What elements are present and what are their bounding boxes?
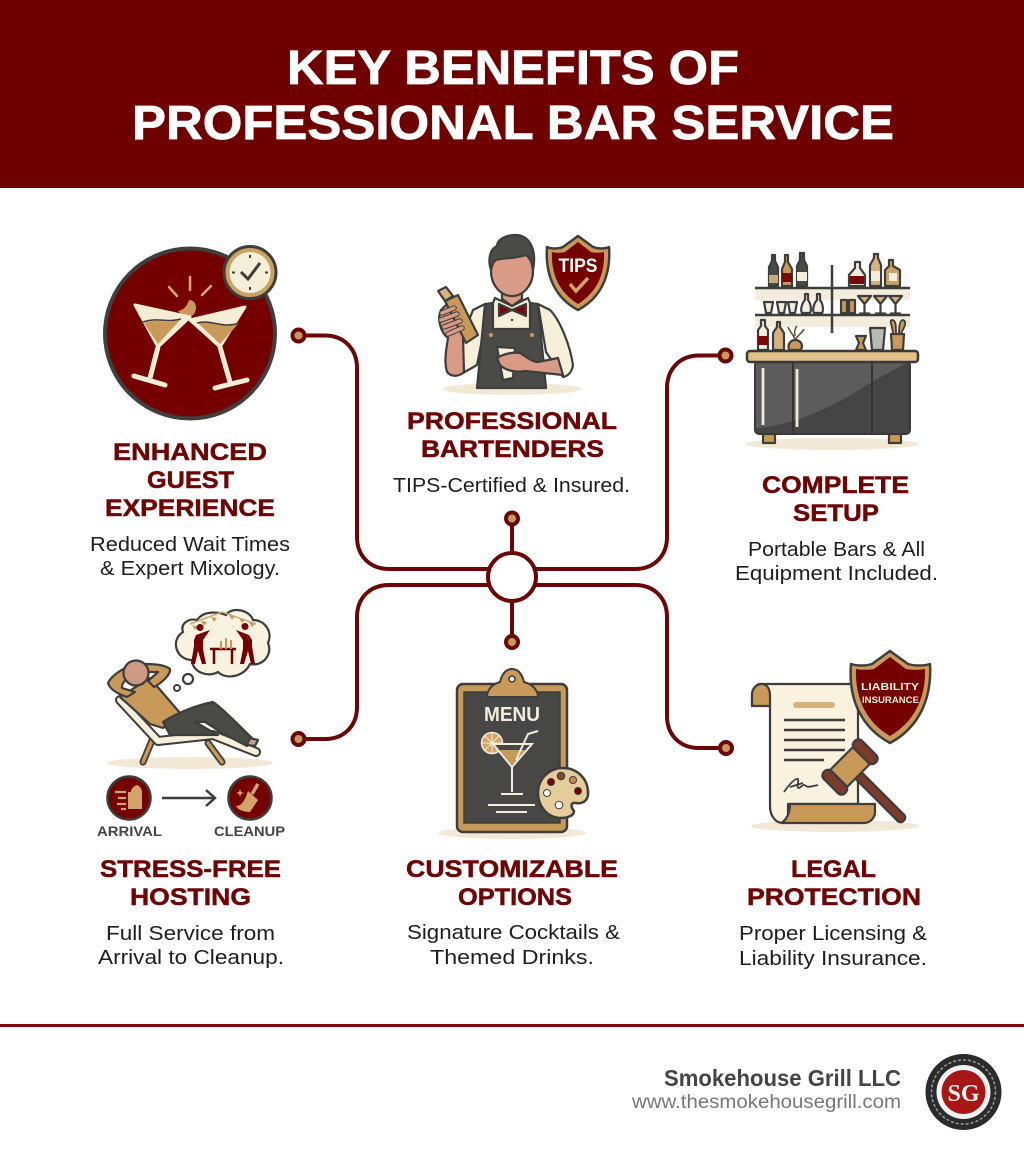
heading: STRESS-FREE	[100, 856, 281, 883]
title: PROFESSIONAL BAR SERVICE	[132, 97, 894, 150]
heading	[407, 408, 617, 463]
heading	[747, 856, 921, 911]
icon: bartender with TIPS shield: TIPS	[558, 256, 598, 277]
heading	[100, 856, 281, 911]
description: Proper Licensing &	[739, 923, 928, 945]
description	[739, 923, 928, 970]
icon: menu clipboard with palette	[438, 669, 588, 839]
heading: BARTENDERS	[421, 436, 604, 463]
website: www.thesmokehousegrill.com	[631, 1091, 901, 1113]
description: & Expert Mixology.	[100, 558, 280, 580]
description: Full Service from	[106, 923, 275, 945]
heading: ENHANCED	[113, 439, 267, 466]
logo	[926, 1054, 1002, 1130]
heading: HOSTING	[130, 884, 251, 911]
description	[98, 923, 284, 969]
title: KEY BENEFITS OF	[287, 42, 739, 95]
heading: PROTECTION	[747, 884, 921, 911]
heading: OPTIONS	[458, 884, 572, 911]
heading: LEGAL	[791, 856, 876, 883]
description: TIPS-Certified & Insured.	[393, 475, 630, 497]
icon: bartender with TIPS shield	[438, 235, 609, 395]
description: Arrival to Cleanup.	[98, 947, 284, 969]
description: Equipment Included.	[735, 563, 938, 585]
header banner	[0, 0, 1024, 188]
description: Signature Cocktails &	[407, 922, 621, 944]
heading	[762, 472, 909, 527]
panel: customizable options	[406, 669, 621, 969]
heading: CUSTOMIZABLE	[406, 856, 618, 883]
icon: relaxed host on lounger with thought cloud	[97, 610, 285, 839]
footer	[0, 1024, 1024, 1130]
heading: EXPERIENCE	[105, 495, 275, 522]
heading	[406, 856, 618, 911]
company name: Smokehouse Grill LLC	[664, 1065, 901, 1091]
panel: professional bartenders	[393, 235, 630, 497]
icon: relaxed host on lounger with thought cloud: ARRIVAL	[97, 824, 162, 839]
heading: PROFESSIONAL	[407, 408, 617, 435]
description: Liability Insurance.	[739, 948, 927, 970]
title	[132, 42, 894, 150]
icon: contract scroll, gavel and liability shield: LIABILITY	[861, 681, 919, 693]
icon: relaxed host on lounger with thought cloud: CLEANUP	[214, 824, 285, 839]
icon: menu clipboard with palette: MENU	[484, 704, 540, 726]
panel: stress-free hosting	[97, 610, 285, 969]
description	[735, 539, 938, 585]
icon: clinking glasses with clock	[105, 246, 276, 418]
connector hub diagram	[292, 330, 732, 754]
description: Themed Drinks.	[430, 947, 594, 969]
heading: GUEST	[147, 467, 234, 494]
description	[407, 922, 621, 969]
heading: COMPLETE	[762, 472, 909, 499]
icon: portable bar with shelves	[745, 253, 919, 450]
panel: enhanced guest experience	[90, 246, 290, 580]
description	[90, 534, 290, 580]
panel: legal protection	[739, 651, 930, 970]
panel: complete setup	[735, 253, 938, 585]
heading: SETUP	[793, 500, 879, 527]
logo: SG	[947, 1081, 980, 1107]
heading	[105, 439, 275, 522]
description: Reduced Wait Times	[90, 534, 290, 556]
description: Portable Bars & All	[748, 539, 925, 561]
icon: contract scroll, gavel and liability shield	[751, 651, 930, 840]
icon: contract scroll, gavel and liability shield: INSURANCE	[862, 695, 919, 706]
